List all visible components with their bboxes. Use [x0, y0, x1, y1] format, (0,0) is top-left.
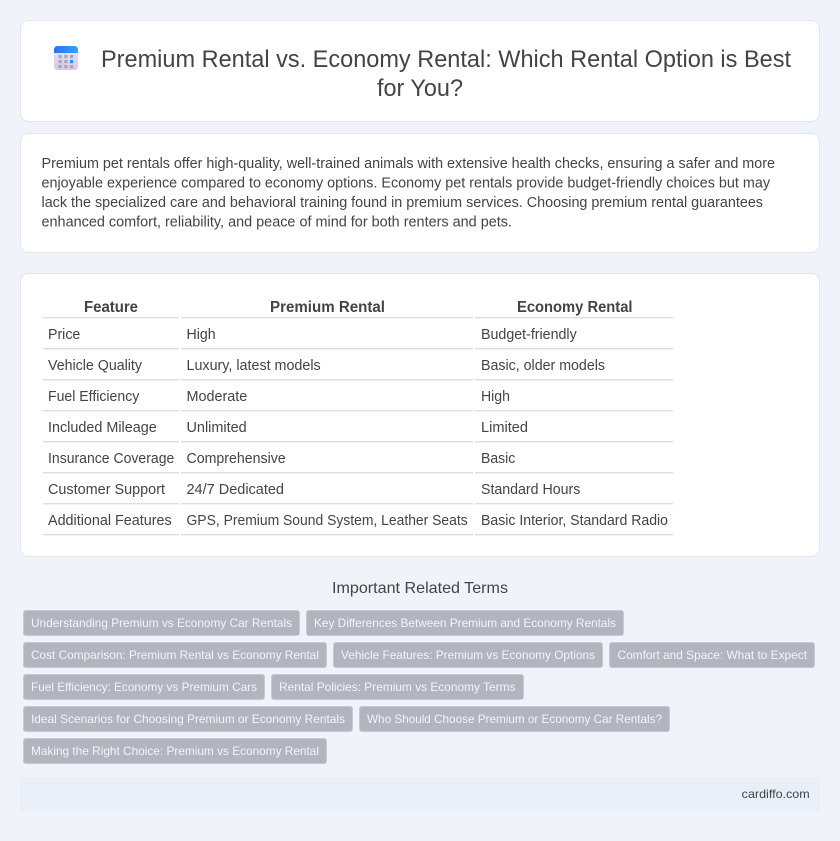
text block: summary: Premium pet rentals offer high-quality, well-trained animals with extensive health checks, ensuring a safer and more [42, 156, 775, 172]
tag [24, 706, 352, 732]
row: insurance coverage [43, 451, 673, 473]
tag [24, 610, 300, 636]
row: vehicle quality: Basic, older models [481, 358, 605, 374]
row: customer support [43, 482, 673, 504]
title: for You? [377, 75, 463, 102]
tag [610, 642, 814, 668]
tag: Cost Comparison: Premium Rental vs Economy Rental [31, 648, 319, 662]
row: included mileage: Limited [481, 420, 528, 436]
row: additional features: Basic Interior, Standard Radio [481, 513, 668, 529]
row: additional features: GPS, Premium Sound System, Leather Seats [186, 513, 468, 529]
tag list: related terms [24, 610, 814, 764]
row: included mileage: Unlimited [186, 420, 247, 436]
title [101, 46, 791, 102]
row: customer support: 24/7 Dedicated [186, 482, 284, 498]
text block: summary: enjoyable experience compared to economy options. Economy pet rentals provide budget-friendly choices but may [42, 176, 771, 192]
tag: Making the Right Choice: Premium vs Economy Rental [31, 744, 319, 758]
row: vehicle quality: Vehicle Quality [48, 358, 143, 374]
header panel [20, 20, 820, 122]
tag [334, 642, 602, 668]
tag [272, 674, 524, 700]
row: fuel efficiency [43, 389, 673, 411]
tag: Comfort and Space: What to Expect [618, 648, 808, 662]
panel: comparison table [20, 274, 820, 556]
row: price: Budget-friendly [481, 327, 577, 343]
footer bar [20, 777, 820, 811]
row: fuel efficiency: High [481, 389, 510, 405]
table header row: Feature [84, 299, 138, 316]
row: price: Price [48, 327, 80, 343]
row: additional features: Additional Features [48, 513, 172, 529]
tag [24, 738, 326, 764]
row: insurance coverage: Insurance Coverage [48, 451, 174, 467]
panel: summary paragraph [20, 134, 820, 252]
row: customer support: Standard Hours [481, 482, 580, 498]
title: Premium Rental vs. Economy Rental: Which Rental Option is Best [101, 46, 791, 73]
row: price [43, 327, 673, 349]
tag [360, 706, 670, 732]
text block: summary: enhanced comfort, reliability, and peace of mind for both renters and pets. [42, 214, 512, 230]
icon: calendar [54, 46, 78, 70]
tag: Ideal Scenarios for Choosing Premium or Economy Rentals [31, 712, 345, 726]
tag: Rental Policies: Premium vs Economy Terms [279, 680, 516, 694]
tag: Understanding Premium vs Economy Car Rentals [31, 616, 292, 630]
row: fuel efficiency: Moderate [186, 389, 247, 405]
tag: Vehicle Features: Premium vs Economy Options [341, 648, 595, 662]
tag: Key Differences Between Premium and Economy Rentals [314, 616, 616, 630]
footer source text: cardiffo.com [742, 787, 810, 801]
row: additional features [43, 513, 673, 535]
row: insurance coverage: Basic [481, 451, 515, 467]
tag: Who Should Choose Premium or Economy Car Rentals? [367, 712, 662, 726]
row: included mileage [43, 420, 673, 442]
row: customer support: Customer Support [48, 482, 165, 498]
tag: Fuel Efficiency: Economy vs Premium Cars [31, 680, 257, 694]
row: vehicle quality [43, 358, 673, 380]
table header row [43, 299, 673, 318]
table header row: Premium Rental [270, 299, 385, 316]
text block: summary [42, 156, 775, 230]
tag [24, 642, 326, 668]
tag [24, 674, 264, 700]
row: included mileage: Included Mileage [48, 420, 157, 436]
row: vehicle quality: Luxury, latest models [186, 358, 321, 374]
table header row: Economy Rental [517, 299, 632, 316]
row: fuel efficiency: Fuel Efficiency [48, 389, 140, 405]
tag [306, 610, 624, 636]
row: insurance coverage: Comprehensive [186, 451, 286, 467]
heading: important related terms: Important Related Terms [332, 580, 508, 597]
text block: summary: lack the specialized care and behavioral training found in premium services. Choosing premium rental guarantees [42, 195, 763, 211]
row: price: High [186, 327, 216, 343]
